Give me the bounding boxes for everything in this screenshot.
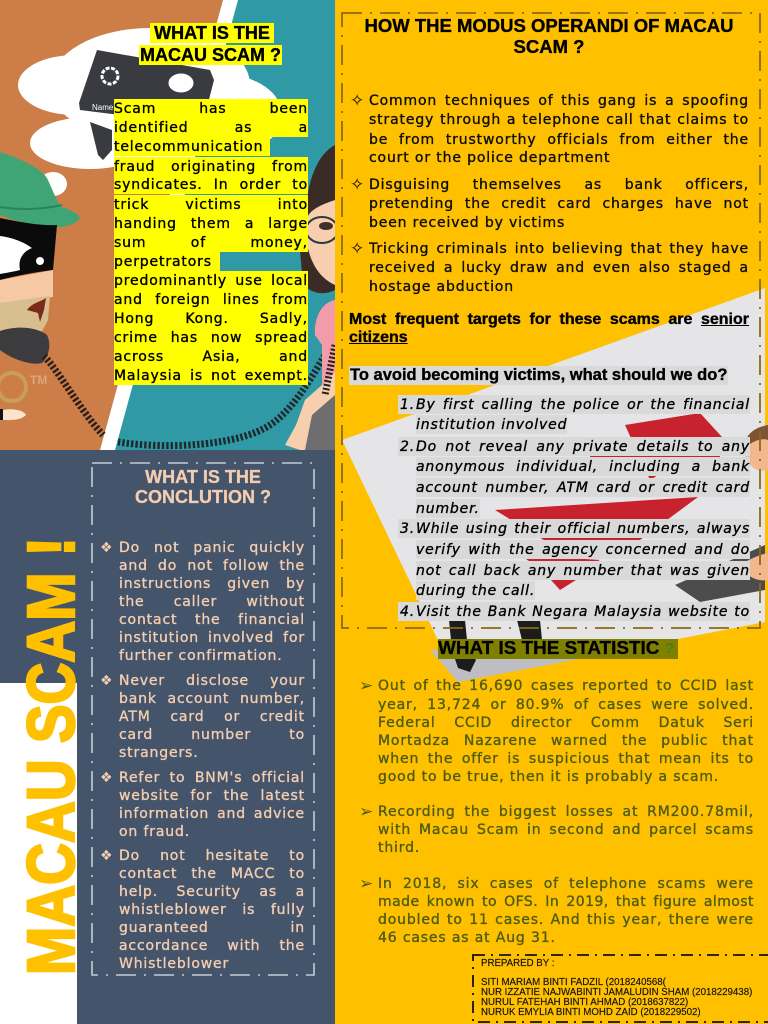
bullet: biggest losses: third. xyxy=(378,840,420,856)
white block xyxy=(0,683,77,1024)
bullet: cases solved: year, 13,724 or 80.9% of cases were solved. xyxy=(378,697,754,713)
bullet: disguising: been received by victims xyxy=(369,215,565,231)
bullet: do not panic: contact the financial xyxy=(119,612,305,628)
bullet: refer to bnm xyxy=(100,770,305,840)
bullet: cases solved: good to be true, then it is probably a scam. xyxy=(378,769,719,785)
bullet: do not panic: ❖ xyxy=(100,540,113,556)
bullet: telephone scams: doubled to 11 cases. And this year, there were xyxy=(378,912,754,928)
bullet: do not panic: Do not panic quickly xyxy=(119,540,305,556)
bullet: spoofing: strategy through a telephone call that claims to xyxy=(369,112,749,128)
numbered list: advice: anonymous individual, including a bank xyxy=(416,459,750,475)
text block: scam definition: Malaysia is not exempt. xyxy=(114,368,308,384)
heading: what is the macau scam xyxy=(139,23,282,65)
heading: conclusion: WHAT IS THE xyxy=(145,467,261,487)
illustration: paper with red stamp xyxy=(342,288,768,682)
text block: scam definition: Scam has been xyxy=(114,101,308,117)
bullet: telephone scams xyxy=(359,874,754,946)
bullet: do not panic: and do not follow the xyxy=(119,558,305,574)
numbered list: advice: verify with the agency concerned and do xyxy=(416,542,750,558)
bullet: contact macc: Whistleblower xyxy=(119,956,229,972)
bullet: disguising: Disguising themselves as bank officers, xyxy=(369,177,749,193)
bullet: telephone scams: 46 cases as at Aug 31. xyxy=(378,930,556,946)
bullet: telephone scams: made known to OFS. In 2019, that figure almost xyxy=(378,894,754,910)
bullet: contact macc: Do not hesitate to xyxy=(119,848,305,864)
bullet: spoofing: be from trustworthy officials from either the xyxy=(369,132,749,148)
heading: modus operandi: SCAM ? xyxy=(514,36,584,57)
heading: modus operandi xyxy=(365,15,733,57)
numbered list: advice: While using their official numbers, always xyxy=(416,521,750,537)
bullet: never disclose xyxy=(100,673,305,761)
bullet: biggest losses: with Macau Scam in second and parcel scams xyxy=(378,822,754,838)
bullet: tricking: received a lucky draw and even also staged a xyxy=(369,260,749,276)
bullet: do not panic xyxy=(100,540,305,664)
text block: scam definition: perpetrators xyxy=(114,254,212,270)
illustration: scammer and victim phone call: TM xyxy=(30,373,47,387)
heading: conclusion: CONCLUTION ? xyxy=(135,487,271,507)
bullet: biggest losses: ➢ xyxy=(359,802,373,822)
numbered list: advice: number. xyxy=(416,501,480,517)
numbered list: advice xyxy=(398,395,750,621)
text block: scam definition xyxy=(114,99,308,385)
bullet: never disclose: ❖ xyxy=(100,673,113,689)
bullet: contact macc: help. Security as a xyxy=(119,884,305,900)
bullet: cases solved: Mortadza Nazarene warned the public that xyxy=(378,733,754,749)
credits: prepared by: NUR IZZATIE NAJWABINTI JAMALUDIN SHAM (2018229438) xyxy=(481,987,752,998)
heading: what is the statistic: ? xyxy=(665,640,674,657)
bullet: contact macc: guaranteed in xyxy=(119,920,305,936)
bullet: refer to bnm: website for the latest xyxy=(119,788,305,804)
numbered list: advice: 2. xyxy=(400,439,415,455)
panel: modus operandi xyxy=(341,12,761,629)
bullet: cases solved: Out of the 16,690 cases reported to CCID last xyxy=(378,678,754,694)
text block: scam definition: across Asia, and xyxy=(114,349,308,365)
bullet: tricking xyxy=(350,239,749,295)
bullet: do not panic: further confirmation. xyxy=(119,648,283,664)
numbered list: advice: not call back any number that was given xyxy=(416,563,750,579)
heading: avoid becoming victims: To avoid becoming victims, what should we do? xyxy=(350,366,727,384)
numbered list: advice: 4. xyxy=(400,604,415,620)
heading: what is the statistic: WHAT IS THE STATISTIC xyxy=(438,638,659,659)
text block: scam definition: crime has now spread xyxy=(114,330,308,346)
credits: prepared by: SITI MARIAM BINTI FADZIL (2018240568( xyxy=(481,977,666,988)
bullet: spoofing: ✧ xyxy=(350,91,364,111)
numbered list: advice: institution involved xyxy=(416,417,567,433)
bullet: biggest losses: Recording the biggest losses at RM200.78mil, xyxy=(378,804,754,820)
illustration: scammer and victim phone call xyxy=(0,0,335,450)
bullet: do not panic: institution involved for xyxy=(119,630,305,646)
bullet: cases solved xyxy=(359,676,754,785)
bullet: biggest losses xyxy=(359,802,754,856)
illustration: scammer and victim phone call: Name xyxy=(92,103,114,112)
text block: scam definition: trick victims into xyxy=(114,197,308,213)
heading: what is the macau scam: WHAT IS THE xyxy=(154,23,270,43)
bullet: cases solved: ➢ xyxy=(359,676,373,696)
dashed frame xyxy=(472,954,768,1023)
dashed frame xyxy=(91,462,315,976)
credits: prepared by: NURUL FATEHAH BINTI AHMAD (2018637822) xyxy=(481,997,688,1008)
text block: scam definition: Hong Kong. Sadly, xyxy=(114,311,308,327)
bullet: refer to bnm: on fraud. xyxy=(119,824,190,840)
bullet: spoofing: court or the police department xyxy=(369,150,610,166)
credits: prepared by xyxy=(472,954,768,1023)
bullet: contact macc: contact the MACC to xyxy=(119,866,305,882)
callout: most frequent targets: citizens xyxy=(349,329,408,346)
bullet: refer to bnm: Refer to BNM's official xyxy=(119,770,305,786)
panel: statistic xyxy=(359,676,754,946)
numbered list: advice: 3. xyxy=(400,521,415,537)
text block: scam definition: sum of money, xyxy=(114,235,308,251)
bullet: refer to bnm: information and advice xyxy=(119,806,305,822)
numbered list: advice: during the call. xyxy=(416,583,535,599)
bullet: cases solved: when the offer is suspicious that mean its to xyxy=(378,751,754,767)
text block: scam definition: handing them a large xyxy=(114,216,308,232)
numbered list: advice: By first calling the police or the financial xyxy=(416,397,750,413)
callout: most frequent targets: Most frequent targets for these scams are senior xyxy=(349,311,749,328)
numbered list: advice: account number, ATM card or credit card xyxy=(416,480,750,496)
bullet: never disclose: Never disclose your xyxy=(119,673,305,689)
dashed frame xyxy=(341,12,761,629)
bullet: never disclose: ATM card or credit xyxy=(119,709,305,725)
heading: conclusion xyxy=(135,467,271,507)
bullet: refer to bnm: ❖ xyxy=(100,770,113,786)
bullet: tricking: Tricking criminals into believing that they have xyxy=(369,241,749,257)
credits: prepared by: NURUK EMYLIA BINTI MOHD ZAID (2018229502) xyxy=(481,1007,701,1018)
callout: most frequent targets xyxy=(349,311,749,346)
numbered list: advice: 1. xyxy=(400,397,415,413)
text block: scam definition: syndicates. In order to xyxy=(114,177,308,193)
text block: scam definition: and foreign lines from xyxy=(114,292,308,308)
bullet: never disclose: card number to xyxy=(119,727,305,743)
bullet: do not panic: instructions given by xyxy=(119,576,305,592)
bullet: spoofing: Common techniques of this gang is a spoofing xyxy=(369,93,749,109)
credits: prepared by: PREPARED BY : xyxy=(481,958,554,969)
bullet: spoofing xyxy=(350,91,749,166)
panel: what is the macau scam xyxy=(114,23,308,385)
bullet: disguising: ✧ xyxy=(350,175,364,195)
text block: scam definition: identified as a xyxy=(114,120,308,136)
bullet: never disclose: strangers. xyxy=(119,745,198,761)
text block: scam definition: fraud originating from xyxy=(114,159,308,175)
bullet: tricking: hostage abduction xyxy=(369,279,514,295)
bullet: never disclose: bank account number, xyxy=(119,691,305,707)
bullet: contact macc: accordance with the xyxy=(119,938,305,954)
numbered list: advice: Do not reveal any private details to any xyxy=(416,439,750,455)
heading: what is the macau scam: MACAU SCAM ? xyxy=(140,45,281,65)
panel: conclusion xyxy=(91,462,315,976)
bullet: tricking: ✧ xyxy=(350,239,364,259)
bullet: contact macc: whistleblower is fully xyxy=(119,902,305,918)
heading: modus operandi: HOW THE MODUS OPERANDI OF MACAU xyxy=(365,15,733,36)
text block: scam definition: telecommunication xyxy=(114,139,263,155)
bullet: contact macc: ❖ xyxy=(100,848,113,864)
bullet: cases solved: Federal CCID director Comm Datuk Seri xyxy=(378,715,754,731)
panel: conclusion background xyxy=(0,450,335,1024)
bullet: disguising xyxy=(350,175,749,231)
numbered list: advice: Visit the Bank Negara Malaysia website to xyxy=(416,604,750,620)
text block: scam definition: predominantly use local xyxy=(114,273,308,289)
bullet: telephone scams: ➢ xyxy=(359,874,373,894)
bullet: do not panic: the caller without xyxy=(119,594,305,610)
bullet: contact macc xyxy=(100,848,305,972)
bullet: disguising: pretending the credit card charges have not xyxy=(369,196,749,212)
bullet: telephone scams: In 2018, six cases of telephone scams were xyxy=(378,876,754,892)
